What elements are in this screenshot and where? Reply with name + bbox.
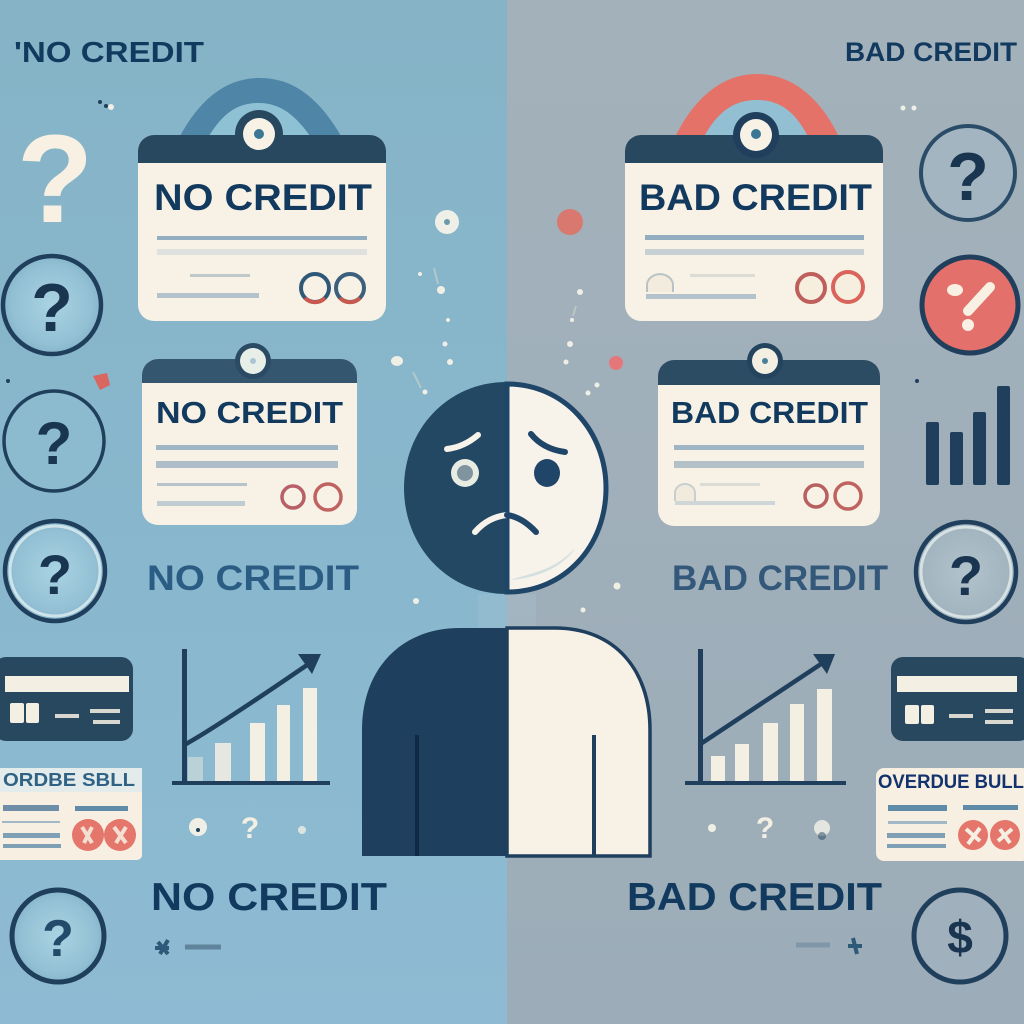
bill: right overdue: OVERDUE BULL <box>878 772 1024 793</box>
heading: bad credit bottom: BAD CREDIT <box>627 876 882 919</box>
heading: no credit bottom: NO CREDIT <box>151 876 387 919</box>
card: bad credit large: BAD CREDIT <box>639 177 872 218</box>
icon: question circle right 2 <box>916 522 1016 622</box>
icon: question circle left 2: ? <box>36 410 72 477</box>
heading: no credit middle: NO CREDIT <box>147 559 359 598</box>
icon: question circle left 2 <box>4 391 104 491</box>
person neck shadow <box>478 594 536 628</box>
icon: question circle left 1: ? <box>31 270 73 346</box>
card: no credit medium <box>142 343 357 525</box>
icon: red alert circle <box>922 257 1018 353</box>
chart: no credit growth <box>172 649 330 785</box>
panel: bad credit background <box>507 0 1024 1024</box>
card: no credit large: NO CREDIT <box>154 177 372 218</box>
icon: large white question mark: ? <box>17 110 93 249</box>
bill: left overdue <box>0 768 142 860</box>
small question glyphs: ? <box>756 812 774 845</box>
small question glyphs <box>241 812 774 845</box>
chart: bad credit growth <box>685 649 846 785</box>
card: no credit large <box>138 78 386 321</box>
small question glyphs: ? <box>241 812 259 845</box>
icon: question circle left 3: ? <box>38 543 72 606</box>
card: bad credit medium: BAD CREDIT <box>671 395 868 430</box>
icon: question circle right 1: ? <box>947 139 989 215</box>
icon: question circle left 3 <box>5 521 105 621</box>
icon: right bar chart <box>926 386 1010 485</box>
person face <box>404 382 606 594</box>
icon: question circle right 2: ? <box>949 544 983 607</box>
heading: bad credit top right: BAD CREDIT <box>845 37 1018 67</box>
card: bad credit medium <box>658 343 880 526</box>
icon: right credit card <box>891 657 1024 741</box>
icon: question circle right 1 <box>921 126 1015 220</box>
icon: left credit card <box>0 657 133 741</box>
figure: split person <box>362 382 650 856</box>
bill: right overdue <box>876 768 1024 861</box>
card: no credit medium: NO CREDIT <box>156 395 343 430</box>
person body <box>362 628 650 856</box>
icon: question circle left 4 <box>12 890 104 982</box>
card: bad credit large <box>625 74 883 321</box>
icon: dollar circle <box>914 890 1006 982</box>
heading: bad credit middle: BAD CREDIT <box>672 559 888 598</box>
icon: question circle left 4: ? <box>42 910 74 968</box>
icon: question circle left 1 <box>3 256 101 354</box>
decorative accents: small marks <box>6 100 919 954</box>
panel: no credit background <box>0 0 507 1024</box>
bill: left overdue: ORDBE SBLL <box>3 770 135 790</box>
heading: no credit top left: 'NO CREDIT <box>14 37 204 69</box>
icon: dollar circle: $ <box>947 911 973 963</box>
